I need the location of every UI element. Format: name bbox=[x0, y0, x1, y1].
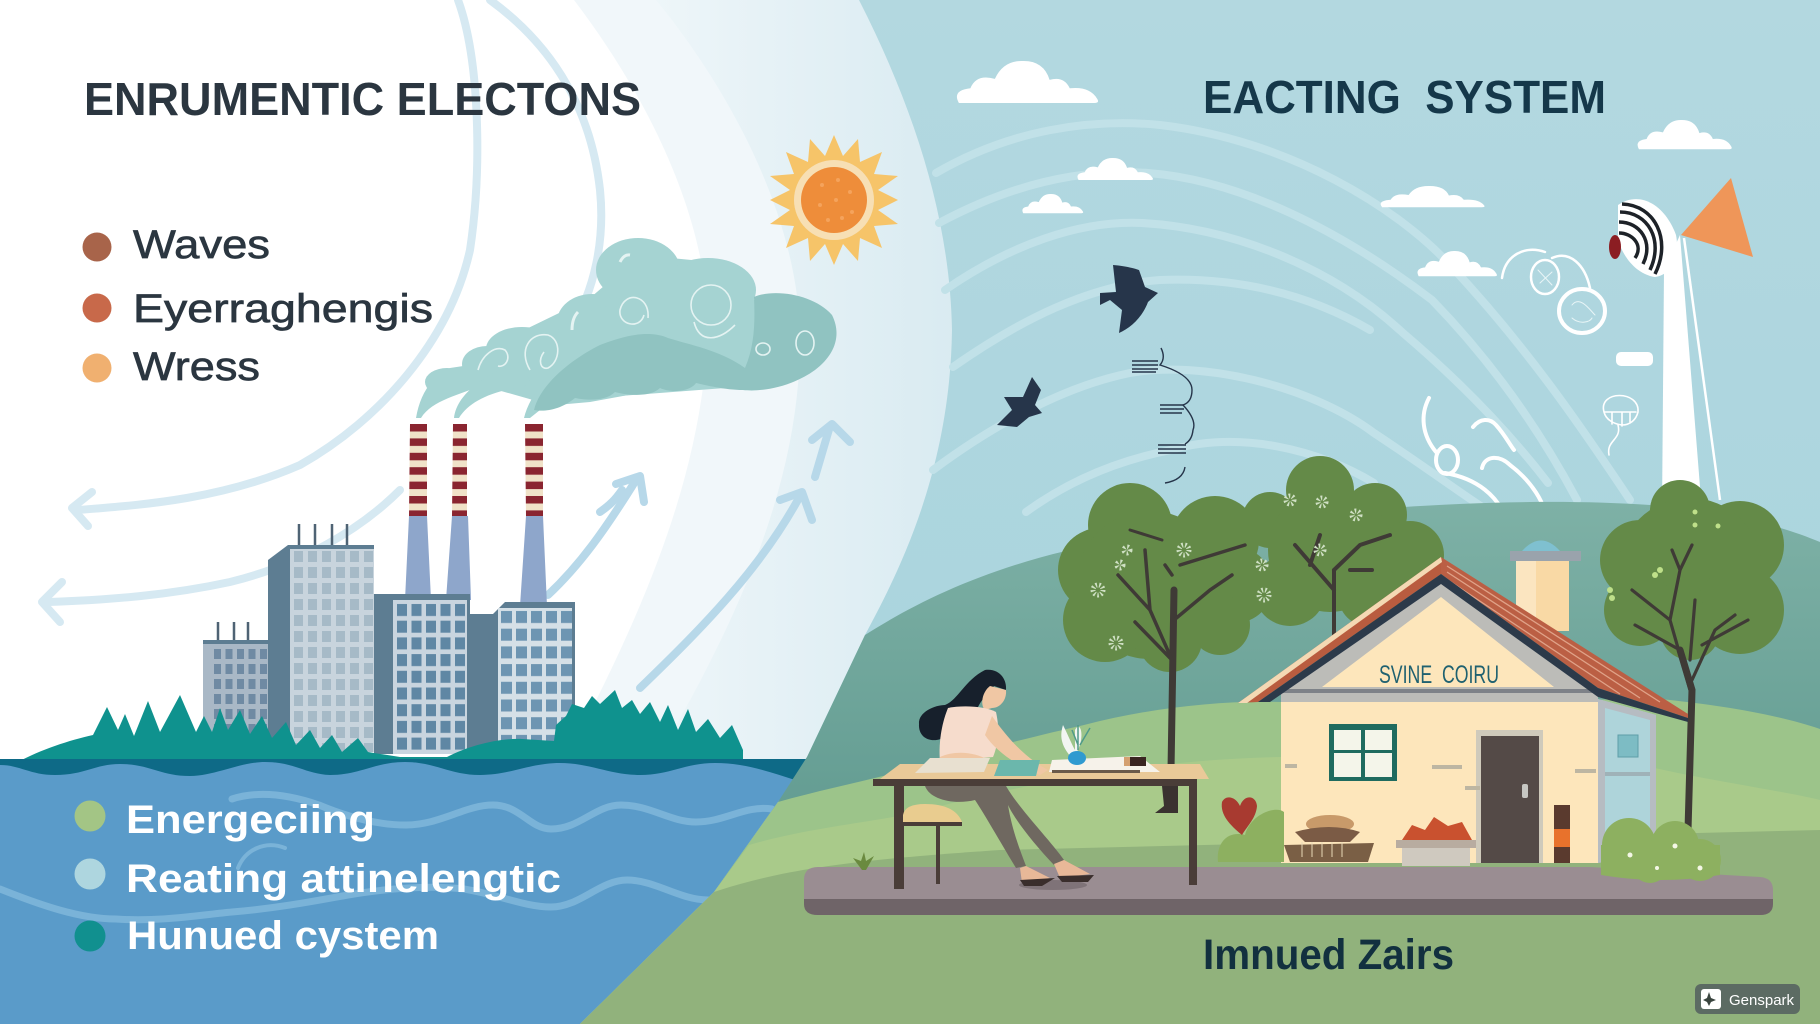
hills bbox=[580, 502, 1820, 1024]
arms bbox=[938, 716, 1048, 775]
basket of bread bbox=[1284, 815, 1374, 862]
pants bbox=[925, 786, 1064, 868]
canopy bbox=[1242, 456, 1444, 627]
water body bbox=[0, 762, 795, 1024]
left atmospheric arc arrows bbox=[42, 0, 601, 622]
tree: back left bbox=[1242, 456, 1444, 640]
legend: water factors bbox=[74, 798, 561, 958]
caption: bottom: Imnued Zairs bbox=[1203, 931, 1454, 979]
torso bbox=[940, 706, 998, 762]
planter of fruit bbox=[1396, 817, 1476, 866]
face bbox=[982, 686, 1006, 710]
trunk and branches bbox=[1632, 545, 1748, 830]
middle hill bbox=[580, 699, 1820, 1024]
tree: left bbox=[1058, 483, 1360, 770]
icon: dish bbox=[1618, 199, 1677, 277]
legend: air factors bbox=[82, 223, 433, 389]
small building bbox=[203, 622, 270, 752]
dark smoke shade bbox=[534, 293, 837, 411]
hanging diagram chain bbox=[1132, 348, 1194, 483]
icon: birds bbox=[997, 265, 1158, 427]
smoke swirls bbox=[478, 255, 814, 370]
legend: water factors: Hunued cystem bbox=[127, 914, 439, 958]
water ripples bbox=[0, 794, 772, 920]
side wall bbox=[1598, 699, 1656, 863]
signal tower bbox=[1609, 178, 1753, 512]
sun bbox=[770, 135, 898, 265]
table legs bbox=[894, 786, 904, 889]
legend: air factors: Waves bbox=[133, 223, 270, 267]
window bbox=[1329, 724, 1397, 781]
sun disk bbox=[801, 167, 867, 233]
chimney bodies bbox=[405, 516, 547, 606]
light smoke puffs bbox=[416, 238, 765, 418]
canopy bbox=[1058, 483, 1273, 672]
chimney stripes bbox=[409, 424, 543, 516]
legend: water factors: Energeciing bbox=[126, 798, 375, 842]
legend: air factors: Wress bbox=[133, 345, 260, 389]
book bbox=[994, 760, 1040, 776]
roof dark trim bbox=[1258, 574, 1688, 722]
dark shoreline band bbox=[0, 759, 808, 790]
papers bbox=[915, 758, 990, 773]
red dot bbox=[1609, 235, 1621, 259]
sign text: SVINE COIRU bbox=[1379, 661, 1499, 689]
up arrows bbox=[548, 424, 850, 688]
table top bbox=[880, 764, 1209, 779]
light hill band bbox=[580, 757, 1820, 1024]
chair bbox=[903, 804, 962, 884]
bollard bbox=[1554, 805, 1570, 863]
front meadow bbox=[580, 830, 1820, 1024]
sprout on path bbox=[853, 852, 874, 870]
middle building bbox=[374, 594, 470, 754]
chimney bbox=[1510, 540, 1581, 631]
canopy bbox=[1600, 480, 1784, 660]
hair bbox=[919, 670, 1006, 740]
terrace platform bbox=[804, 867, 1773, 915]
blossoms bbox=[1093, 496, 1360, 648]
woman bbox=[919, 670, 1094, 890]
house bbox=[1238, 540, 1688, 866]
dark boot under table bbox=[1155, 786, 1178, 813]
chimneys bbox=[405, 424, 547, 606]
door bbox=[1476, 730, 1543, 863]
signal rings bbox=[1619, 204, 1662, 274]
title: left: ENRUMENTIC ELECTONS bbox=[84, 73, 641, 125]
gable cream bbox=[1322, 597, 1554, 687]
right building bbox=[493, 602, 575, 745]
table bbox=[873, 764, 1209, 889]
bushes right bbox=[1601, 818, 1721, 883]
city buildings bbox=[203, 524, 575, 754]
wall fittings bbox=[1285, 766, 1596, 788]
legend: air factors: Eyerraghengis bbox=[133, 287, 433, 331]
water bbox=[0, 759, 808, 1024]
vase with plant bbox=[1061, 725, 1081, 758]
white doodles: balloons and steam bbox=[1424, 250, 1638, 562]
cake bbox=[1124, 757, 1146, 766]
clouds bbox=[957, 61, 1732, 276]
tall building bbox=[268, 524, 374, 752]
connector block bbox=[470, 614, 499, 749]
icon: orange flag bbox=[1681, 178, 1753, 257]
sky wind arcs bbox=[933, 123, 1630, 512]
tree: right bbox=[1600, 480, 1784, 830]
factory smoke cloud bbox=[416, 238, 837, 418]
floor shadow bbox=[1019, 880, 1087, 890]
forested island bbox=[18, 690, 743, 762]
gable grey bbox=[1281, 582, 1598, 702]
bush with red flower bbox=[1218, 797, 1284, 862]
sun rays bbox=[770, 135, 898, 265]
white pill bbox=[1616, 352, 1653, 366]
trunk and branches bbox=[1118, 530, 1245, 770]
sky panel bbox=[580, 0, 1820, 1024]
badge: Genspark: Genspark bbox=[1729, 992, 1795, 1009]
legend: water factors: Reating attinelengtic bbox=[126, 857, 561, 901]
back hill bbox=[580, 502, 1820, 1024]
items on table bbox=[915, 725, 1160, 776]
badge icon bbox=[1701, 989, 1721, 1009]
badge: Genspark bbox=[1695, 984, 1800, 1014]
title: right: EACTING SYSTEM bbox=[1203, 71, 1606, 123]
front wall bbox=[1281, 700, 1598, 863]
roof bbox=[1441, 557, 1688, 718]
feet bbox=[1020, 860, 1090, 883]
